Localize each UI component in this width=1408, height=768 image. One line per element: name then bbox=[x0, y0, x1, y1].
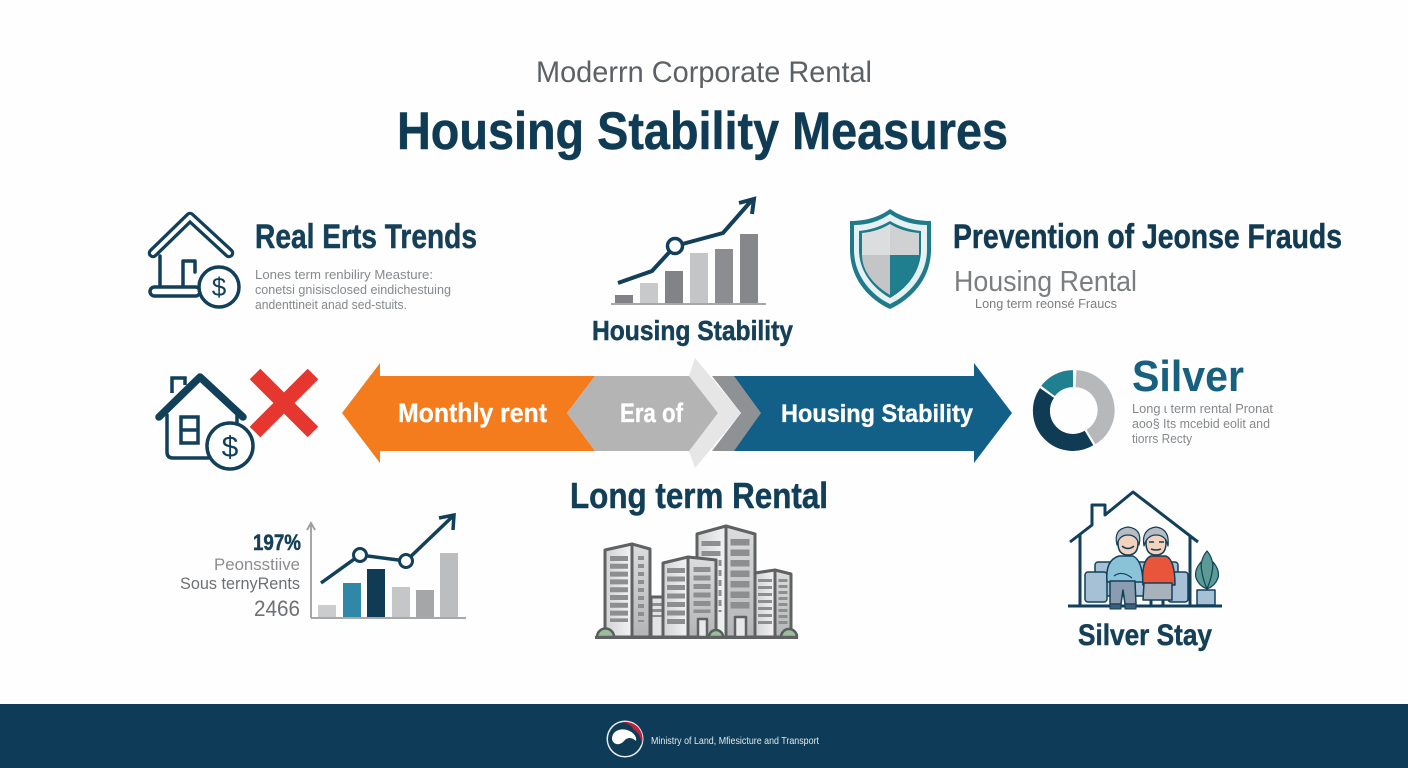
main heading: Housing Stability Measures bbox=[397, 102, 1008, 161]
illustration: city buildings bbox=[595, 526, 798, 639]
icon: house with dollar coin bbox=[150, 217, 239, 307]
icon: government emblem bbox=[606, 720, 644, 758]
caption: Long term reonsé Fraucs bbox=[975, 296, 1117, 311]
label: Housing Stability bbox=[592, 315, 793, 346]
central double arrow bbox=[342, 358, 1012, 468]
body text: aoo§ Its mcebid eolit and bbox=[1132, 417, 1270, 431]
body text: andenttineit anad sed-stuits. bbox=[255, 297, 407, 312]
arrow: housing stability bbox=[734, 363, 1012, 463]
label: Silver Stay bbox=[1078, 619, 1212, 652]
panel: real estate trends bbox=[150, 217, 477, 312]
donut chart bbox=[1041, 379, 1106, 442]
label: monthly rent: Monthly rent bbox=[398, 398, 547, 428]
body text bbox=[1132, 402, 1274, 446]
body text: conetsi gnisisclosed eindichestuing bbox=[255, 282, 451, 297]
footer text: Ministry of Land, Mfiesicture and Transport bbox=[651, 735, 819, 747]
body text: tiorrs Reсty bbox=[1132, 432, 1193, 446]
panel: prevention of jeonse frauds bbox=[850, 209, 1342, 311]
title block bbox=[397, 56, 1008, 161]
arrow: era of bbox=[567, 376, 718, 451]
subheading: Housing Rental bbox=[954, 266, 1137, 298]
icon: shield bbox=[850, 209, 931, 309]
icon: house with dollar coin: $ bbox=[212, 272, 227, 302]
footer band bbox=[0, 704, 1408, 768]
statistics text: 197% bbox=[253, 530, 301, 555]
statistics text: Sous ternyRents bbox=[180, 574, 300, 593]
subtitle: Moderrn Corporate Rental bbox=[536, 56, 872, 89]
bar chart with rising line bbox=[611, 199, 766, 305]
arrow: light chevron bbox=[689, 358, 741, 468]
panel: statistics chart bbox=[180, 515, 466, 621]
statistics text: Peonsstiive bbox=[214, 555, 300, 574]
arrow: dark chevron bbox=[712, 376, 762, 451]
heading: Real Erts Trends bbox=[255, 218, 477, 256]
statistics text: 2466 bbox=[254, 596, 300, 621]
panel: silver bbox=[1041, 352, 1274, 446]
panel: silver stay bbox=[1068, 492, 1222, 652]
illustration: seniors on a sofa inside a house bbox=[1068, 492, 1222, 609]
statistics text bbox=[180, 530, 301, 621]
heading: Silver bbox=[1132, 352, 1244, 401]
panel: housing stability chart bbox=[592, 199, 793, 346]
bar chart with line bbox=[307, 515, 466, 618]
arrow: monthly rent bbox=[342, 363, 595, 463]
body text bbox=[255, 267, 451, 312]
label: housing stability: Housing Stability bbox=[781, 400, 973, 428]
icon: house with dollar coin and red cross bbox=[159, 374, 313, 469]
body text: Long ɩ term rental Pronat bbox=[1132, 402, 1274, 416]
heading: long term rental: Long term Rental bbox=[570, 475, 828, 516]
heading: Prevention of Jeonse Frauds bbox=[953, 218, 1342, 256]
icon: house with dollar coin and red cross: $ bbox=[222, 431, 239, 464]
body text: Lones term renbiliry Measture: bbox=[255, 267, 433, 282]
label: era of: Era of bbox=[620, 398, 684, 428]
